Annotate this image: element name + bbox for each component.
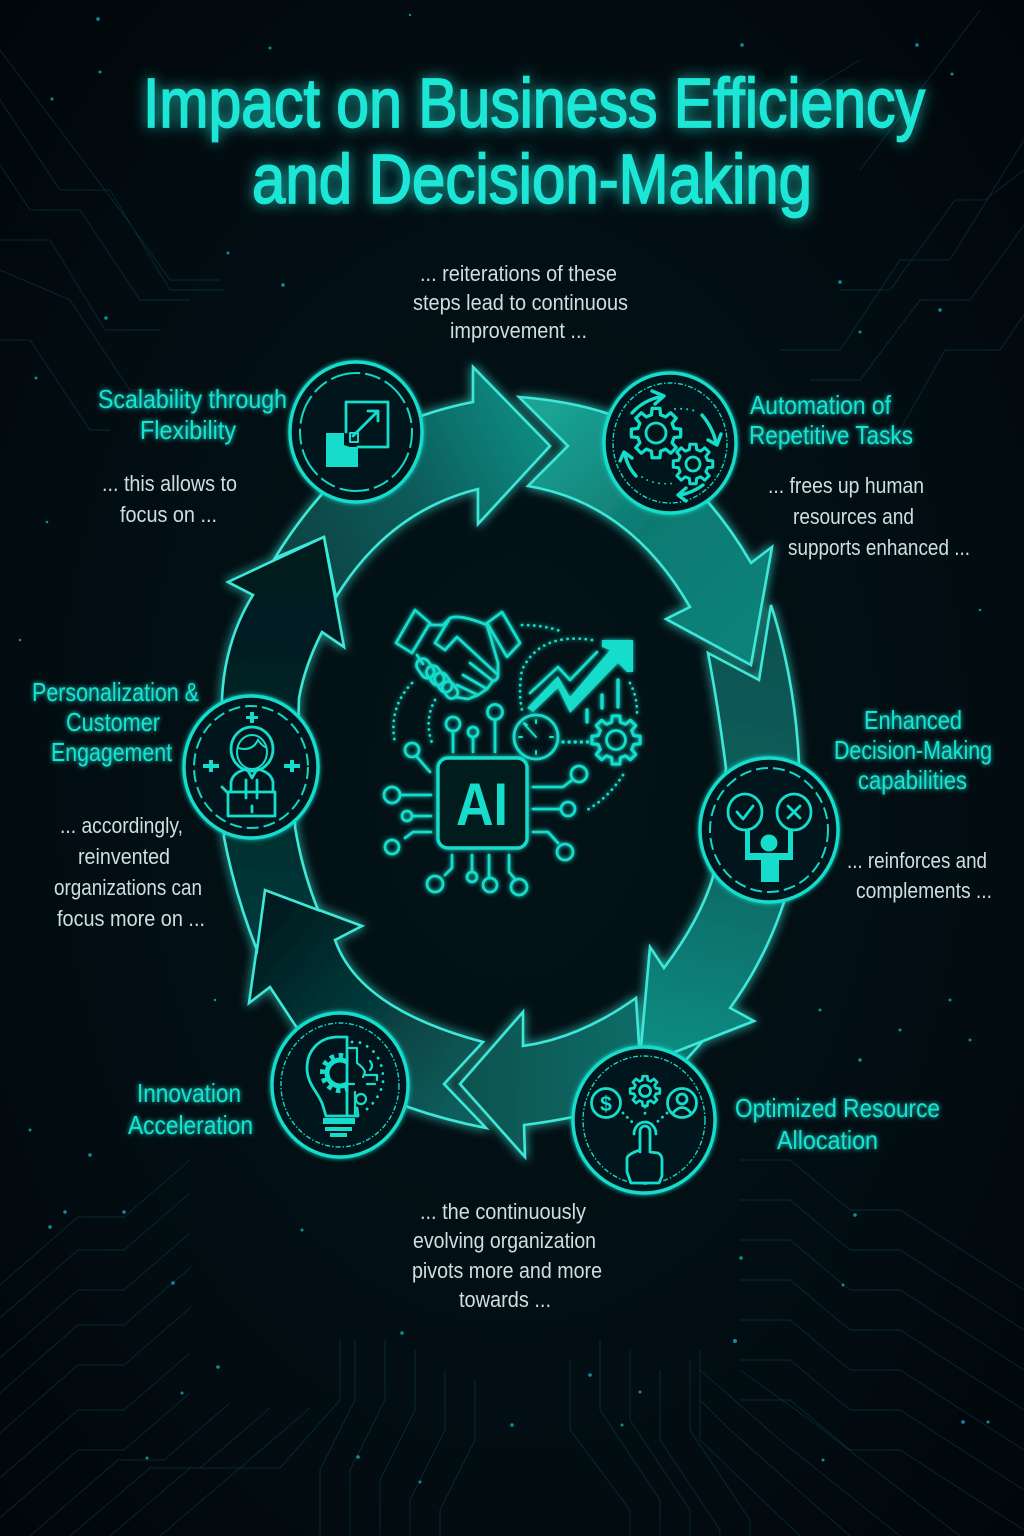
- arrow: automation to decision-making: [519, 397, 772, 665]
- heading: [735, 1093, 940, 1155]
- title: and Decision-Making: [252, 140, 812, 218]
- heading: [749, 390, 913, 450]
- heading: Engagement: [51, 737, 173, 767]
- icon: decision person: [700, 758, 838, 902]
- arrow: scalability to automation: [275, 367, 550, 597]
- text block: resources and: [793, 504, 914, 529]
- heading: Repetitive Tasks: [749, 420, 913, 450]
- icon: scalability: [290, 362, 422, 502]
- heading: Customer: [66, 707, 160, 737]
- heading: [128, 1078, 253, 1140]
- heading: Optimized Resource: [735, 1093, 940, 1123]
- heading: Decision-Making: [834, 735, 992, 765]
- text block: [54, 813, 205, 931]
- panel: enhanced decision-making capabilities: [700, 705, 992, 903]
- icon: growth arrow: [527, 640, 633, 722]
- dotted connections: [393, 625, 637, 810]
- icon: AI chip: [438, 758, 527, 848]
- circuit pins: [384, 704, 587, 895]
- panel: personalization and customer engagement: [32, 677, 318, 931]
- heading: Acceleration: [128, 1110, 253, 1140]
- cycle of arrows: [222, 367, 799, 1157]
- icon: gear: [592, 716, 640, 764]
- text block: ... accordingly,: [60, 813, 183, 838]
- icon: rotating gears: [604, 373, 736, 513]
- icon: customer: [184, 696, 318, 838]
- icon: hand selecting resources: $: [600, 1093, 612, 1116]
- text block: [768, 473, 970, 560]
- heading: capabilities: [858, 765, 967, 795]
- text block: organizations can: [54, 875, 202, 900]
- heading: Flexibility: [140, 415, 236, 445]
- central AI illustration: [384, 610, 640, 895]
- text: top caption: [413, 261, 628, 343]
- panel: scalability through flexibility: [98, 362, 422, 527]
- text block: focus on ...: [120, 502, 217, 527]
- text: bottom caption: towards ...: [459, 1287, 551, 1312]
- heading: Personalization &: [32, 677, 199, 707]
- icon: lightbulb: [272, 1013, 408, 1157]
- text block: ... frees up human: [768, 473, 924, 498]
- text: top caption: ... reiterations of these: [420, 261, 617, 286]
- text block: ... reinforces and: [847, 848, 987, 873]
- panel: automation of repetitive tasks: [604, 373, 970, 560]
- heading: [98, 384, 287, 445]
- icon: handshake: [396, 610, 520, 701]
- title: [143, 64, 925, 218]
- heading: Allocation: [777, 1125, 878, 1155]
- text block: [102, 471, 237, 527]
- text: bottom caption: evolving organization: [413, 1228, 596, 1253]
- heading: Innovation: [137, 1078, 241, 1108]
- panel: innovation acceleration: [128, 1013, 408, 1157]
- heading: Enhanced: [864, 705, 962, 735]
- arrow: personalization to scalability: [222, 537, 344, 950]
- heading: Automation of: [750, 390, 892, 420]
- text: top caption: steps lead to continuous: [413, 290, 628, 315]
- heading: [32, 677, 199, 767]
- text: top caption: improvement ...: [450, 318, 587, 343]
- icon: AI chip: AI: [456, 771, 508, 838]
- heading: [834, 705, 992, 795]
- icon: hand selecting resources: [573, 1047, 715, 1193]
- text: bottom caption: [412, 1199, 602, 1312]
- heading: Scalability through: [98, 384, 287, 414]
- arrow: decision-making to resources: [639, 605, 799, 1070]
- text: bottom caption: pivots more and more: [412, 1258, 602, 1283]
- text: bottom caption: ... the continuously: [420, 1199, 586, 1224]
- icon: clock: [514, 715, 558, 759]
- text block: [847, 848, 992, 903]
- text block: reinvented: [78, 844, 170, 869]
- text block: focus more on ...: [57, 906, 205, 931]
- panel: optimized resource allocation: [573, 1047, 940, 1193]
- arrow: innovation to personalization: [249, 890, 486, 1128]
- text block: ... this allows to: [102, 471, 237, 496]
- arrow: optimized resources to innovation: [460, 998, 701, 1157]
- text block: supports enhanced ...: [788, 535, 970, 560]
- text block: complements ...: [856, 878, 992, 903]
